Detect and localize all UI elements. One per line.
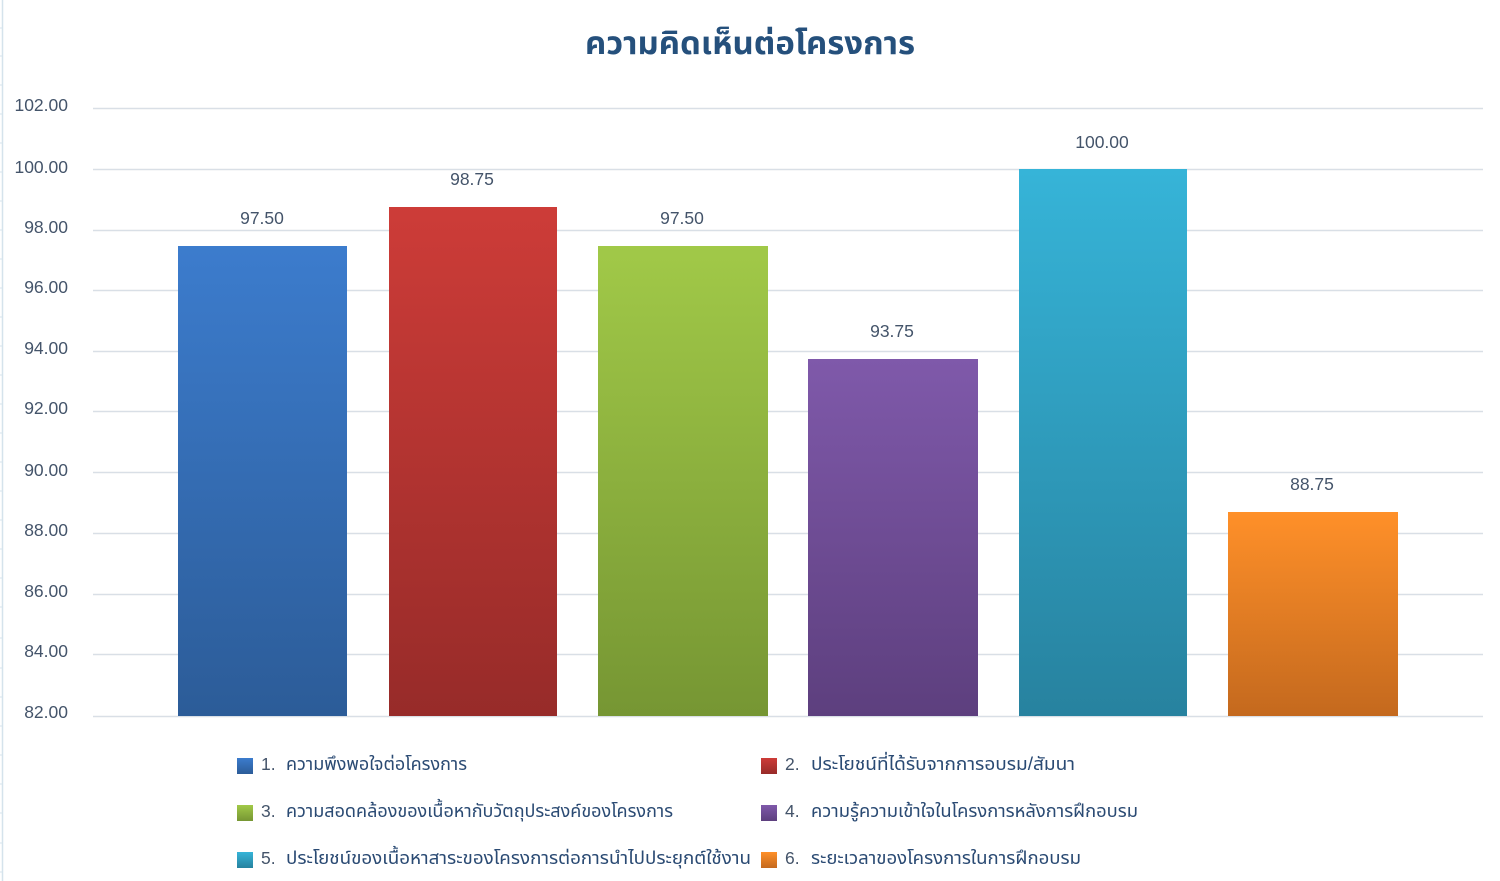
legend item 3: 3. bbox=[261, 801, 276, 821]
bar chart bbox=[178, 132, 1398, 716]
y axis labels: 82.00 bbox=[24, 702, 68, 722]
bar 4 bbox=[808, 321, 978, 716]
bar 3: 97.50 bbox=[660, 208, 704, 228]
legend item 2 bbox=[761, 751, 1075, 774]
bar 5: 100.00 bbox=[1075, 132, 1129, 152]
y axis labels: 102.00 bbox=[14, 95, 68, 115]
y axis labels: 100.00 bbox=[14, 157, 68, 177]
legend item 1: ความพึงพอใจต่อโครงการ bbox=[286, 754, 467, 774]
y axis labels: 98.00 bbox=[24, 217, 68, 237]
y axis labels bbox=[14, 95, 68, 722]
legend item 2: ประโยชน์ที่ได้รับจากการอบรม/สัมนา bbox=[811, 751, 1075, 774]
y axis labels: 92.00 bbox=[24, 398, 68, 418]
legend item 5: ประโยชน์ของเนื้อหาสาระของโครงการต่อการนำไปประยุกต์ใช้งาน bbox=[286, 845, 751, 869]
bar 2: 98.75 bbox=[450, 169, 494, 189]
legend item 5: 5. bbox=[261, 848, 276, 868]
y axis labels: 94.00 bbox=[24, 338, 68, 358]
bar 3 bbox=[598, 208, 768, 716]
title: ความคิดเห็นต่อโครงการ bbox=[585, 25, 915, 61]
bar 5 bbox=[1019, 132, 1187, 716]
y axis labels: 86.00 bbox=[24, 581, 68, 601]
legend item 6: 6. bbox=[785, 848, 800, 868]
legend item 4: ความรู้ความเข้าใจในโครงการหลังการฝึกอบรม bbox=[811, 801, 1138, 823]
bar 1: 97.50 bbox=[240, 208, 284, 228]
y axis labels: 84.00 bbox=[24, 641, 68, 661]
bar 6 bbox=[1228, 474, 1398, 716]
y axis labels: 88.00 bbox=[24, 520, 68, 540]
y axis labels: 90.00 bbox=[24, 460, 68, 480]
legend item 1: 1. bbox=[261, 754, 276, 774]
bar 2 bbox=[389, 169, 557, 716]
y axis labels: 96.00 bbox=[24, 277, 68, 297]
legend item 6: ระยะเวลาของโครงการในการฝึกอบรม bbox=[811, 848, 1081, 868]
bar 6: 88.75 bbox=[1290, 474, 1334, 494]
bar 1 bbox=[178, 208, 347, 716]
legend item 2: 2. bbox=[785, 754, 800, 774]
legend item 4: 4. bbox=[785, 801, 800, 821]
bar 4: 93.75 bbox=[870, 321, 914, 341]
legend item 3: ความสอดคล้องของเนื้อหากับวัตถุประสงค์ของโครงการ bbox=[286, 798, 673, 822]
legend bbox=[237, 751, 1138, 869]
